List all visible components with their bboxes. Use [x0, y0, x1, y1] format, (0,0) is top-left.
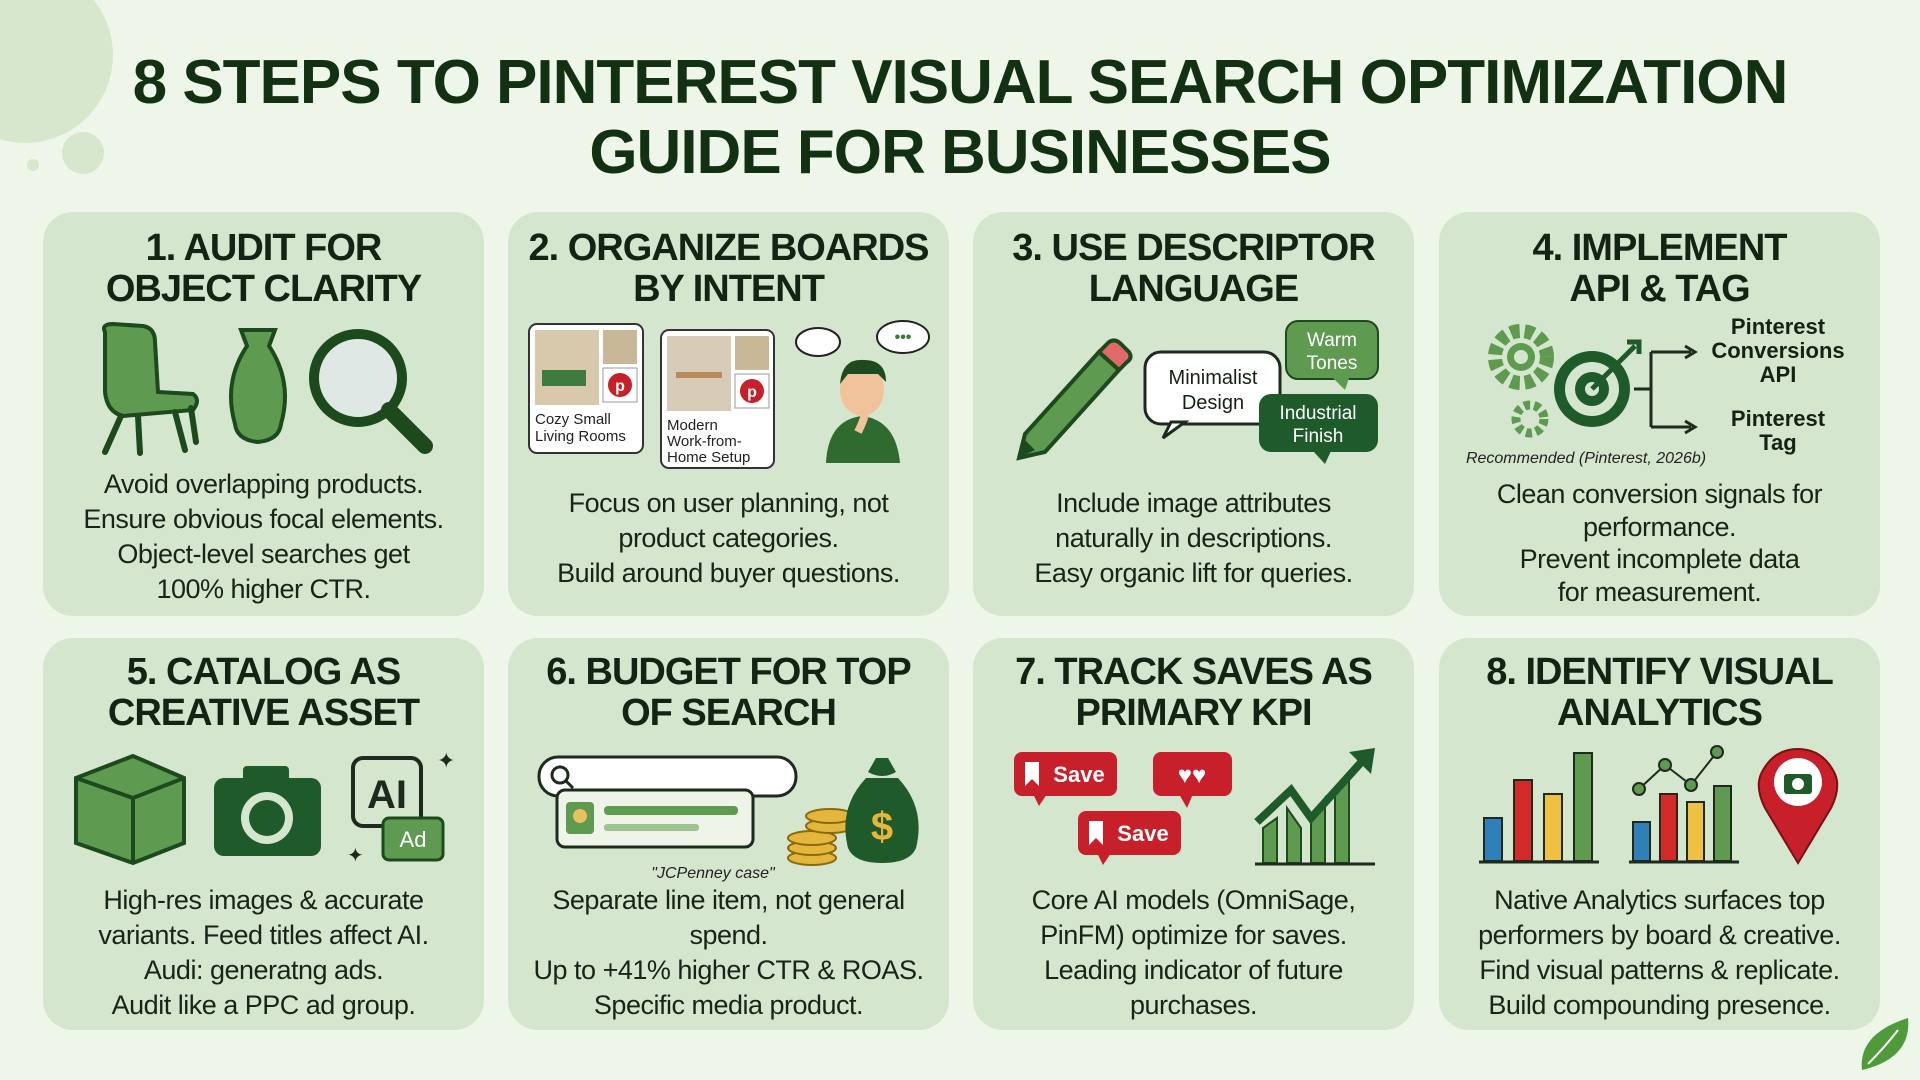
heading 2: BY INTENT — [633, 268, 824, 310]
panel: step 4 — [1439, 212, 1880, 616]
panel: step 6 — [508, 638, 949, 1030]
icons: box camera AI — [74, 748, 455, 867]
icons: save badges and growth chart: Save — [1053, 762, 1105, 787]
body 1: Ensure obvious focal elements. — [83, 504, 444, 534]
body 7: Core AI models (OmniSage, — [1032, 885, 1355, 915]
icons: pencil and tag bubbles: Minimalist — [1169, 367, 1258, 389]
body 3 — [1034, 488, 1353, 588]
heading 5: 5. CATALOG AS — [127, 651, 400, 693]
heading 4: API & TAG — [1569, 268, 1750, 310]
icons: bar charts and location pin — [1479, 745, 1838, 865]
heading 2 — [528, 227, 929, 310]
body 3: naturally in descriptions. — [1055, 523, 1332, 553]
heading 1: OBJECT CLARITY — [106, 268, 421, 310]
body 6: Up to +41% higher CTR & ROAS. — [534, 955, 923, 985]
body 4: performance. — [1583, 512, 1736, 542]
icons: pencil and tag bubbles: Finish — [1293, 426, 1343, 447]
icons: boards and person: Work-from- — [667, 433, 742, 450]
heading 4 — [1532, 227, 1788, 310]
body 7: PinFM) optimize for saves. — [1040, 920, 1347, 950]
icons: boards and person — [528, 320, 930, 469]
icons: pencil and tag bubbles: Industrial — [1279, 403, 1357, 424]
body 4: for measurement. — [1558, 576, 1761, 606]
icons: search bar coins money bag — [538, 756, 919, 882]
body 1: Object-level searches get — [117, 539, 410, 569]
icons: pencil and tag bubbles — [1016, 320, 1379, 464]
title: 8 STEPS TO PINTEREST VISUAL SEARCH OPTIMIZATION — [133, 48, 1787, 117]
body 5: High-res images & accurate — [103, 885, 424, 915]
heading 8: 8. IDENTIFY VISUAL — [1486, 651, 1833, 693]
icons: pencil and tag bubbles: Design — [1182, 392, 1244, 414]
body 8: performers by board & creative. — [1478, 920, 1841, 950]
icons: boards and person: ••• — [895, 329, 912, 346]
icons: save badges and growth chart: ♥♥ — [1178, 762, 1206, 789]
body 1: 100% higher CTR. — [156, 574, 371, 604]
icons: gears target bracket labels: Conversions — [1711, 338, 1845, 363]
icons: boards and person: p — [615, 378, 625, 395]
body 5: Audit like a PPC ad group. — [112, 990, 415, 1020]
body 1 — [83, 469, 444, 604]
heading 2: 2. ORGANIZE BOARDS — [528, 227, 929, 269]
heading 1 — [106, 227, 422, 310]
icons: boards and person: Home Setup — [667, 449, 750, 466]
heading 6: OF SEARCH — [621, 692, 836, 734]
body 7: purchases. — [1130, 990, 1257, 1020]
body 8: Build compounding presence. — [1488, 990, 1831, 1020]
icon: leaf logo — [1862, 1018, 1908, 1070]
panel: step 3 — [973, 212, 1414, 616]
title: GUIDE FOR BUSINESSES — [589, 118, 1331, 187]
body 4 — [1497, 479, 1822, 606]
heading 3: 3. USE DESCRIPTOR — [1012, 227, 1375, 269]
heading 4: 4. IMPLEMENT — [1532, 227, 1787, 269]
icons: gears target bracket labels — [1466, 314, 1845, 467]
heading 6 — [546, 651, 911, 734]
icons: box camera AI: Ad — [400, 827, 426, 852]
icons: pencil and tag bubbles: Warm — [1307, 330, 1357, 351]
icons: search bar coins money bag: $ — [871, 805, 893, 849]
body 6: spend. — [689, 920, 768, 950]
icons: save badges and growth chart — [1014, 748, 1375, 866]
heading 3 — [1012, 227, 1375, 310]
body 3: Easy organic lift for queries. — [1034, 558, 1353, 588]
body 7: Leading indicator of future — [1044, 955, 1343, 985]
body 4: Clean conversion signals for — [1497, 479, 1822, 509]
icons: box camera AI: ✦ — [437, 748, 455, 773]
icons: gears target bracket labels: Pinterest — [1731, 314, 1826, 339]
icons: gears target bracket labels: Pinterest — [1731, 406, 1826, 431]
panel: step 2 — [508, 212, 949, 616]
heading 3: LANGUAGE — [1089, 268, 1298, 310]
body 6: Specific media product. — [594, 990, 863, 1020]
icons: gears target bracket labels: API — [1760, 362, 1796, 387]
heading 7: PRIMARY KPI — [1075, 692, 1312, 734]
body 7 — [1032, 885, 1355, 1020]
heading 8 — [1486, 651, 1833, 734]
heading 7 — [1015, 651, 1372, 734]
icons: gears target bracket labels: Recommended (Pinterest, 2026b) — [1466, 450, 1706, 467]
icons: boards and person: p — [747, 384, 757, 401]
icons: chair vase magnifier — [102, 322, 433, 456]
panel: step 7 — [973, 638, 1414, 1030]
heading 1: 1. AUDIT FOR — [146, 227, 381, 269]
heading 5 — [108, 651, 420, 734]
heading 5: CREATIVE ASSET — [108, 692, 419, 734]
body 5: Audi: generatng ads. — [144, 955, 383, 985]
icons: gears target bracket labels: Tag — [1759, 430, 1797, 455]
body 6 — [534, 885, 923, 1020]
body 8: Find visual patterns & replicate. — [1479, 955, 1840, 985]
heading 7: 7. TRACK SAVES AS — [1015, 651, 1372, 693]
body 8 — [1478, 885, 1841, 1020]
icons: box camera AI: AI — [367, 773, 407, 817]
icons: boards and person: Modern — [667, 417, 718, 434]
title — [133, 48, 1787, 187]
heading 6: 6. BUDGET FOR TOP — [546, 651, 911, 693]
panel: step 5 — [43, 638, 484, 1030]
icons: boards and person: Cozy Small — [535, 411, 611, 428]
body 2 — [557, 488, 900, 588]
body 8: Native Analytics surfaces top — [1494, 885, 1825, 915]
body 5: variants. Feed titles affect AI. — [98, 920, 429, 950]
body 4: Prevent incomplete data — [1520, 544, 1799, 574]
icons: boards and person: Living Rooms — [535, 428, 626, 445]
heading 8: ANALYTICS — [1557, 692, 1762, 734]
body 2: product categories. — [618, 523, 839, 553]
panel: step 8 — [1439, 638, 1880, 1030]
icons: pencil and tag bubbles: Tones — [1307, 353, 1357, 374]
body 6: Separate line item, not general — [552, 885, 905, 915]
icons: search bar coins money bag: "JCPenney case" — [651, 865, 776, 882]
body 2: Build around buyer questions. — [557, 558, 900, 588]
body 1: Avoid overlapping products. — [104, 469, 423, 499]
decoration: circles — [0, 0, 113, 174]
icons: box camera AI: ✦ — [347, 845, 364, 867]
icons: save badges and growth chart: Save — [1117, 821, 1169, 846]
body 5 — [98, 885, 429, 1020]
body 3: Include image attributes — [1056, 488, 1331, 518]
body 2: Focus on user planning, not — [569, 488, 888, 518]
panel: step 1 — [43, 212, 484, 616]
